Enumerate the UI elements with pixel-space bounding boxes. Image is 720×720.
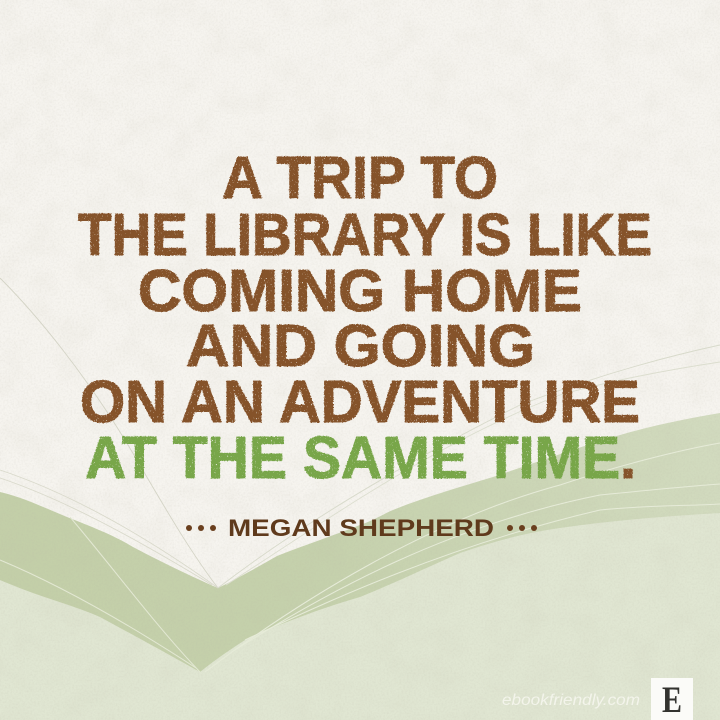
website credit: ebookfriendly.com bbox=[502, 692, 640, 709]
author name: MEGAN SHEPHERD bbox=[228, 515, 494, 542]
quote line 5: ON AN ADVENTURE bbox=[80, 369, 640, 435]
pale lines on left band bbox=[0, 560, 196, 668]
book band: dark green page edge bbox=[0, 413, 720, 680]
pale lines on right band bbox=[205, 443, 720, 672]
leading dots bbox=[186, 525, 216, 531]
quote line 4: AND GOING bbox=[186, 313, 535, 379]
quote line 2: THE LIBRARY IS LIKE bbox=[78, 202, 652, 268]
author attribution bbox=[186, 515, 537, 542]
quote line 6: green highlight: AT THE SAME TIME. bbox=[85, 425, 636, 491]
logo badge bbox=[651, 678, 693, 720]
quote line 3: COMING HOME bbox=[138, 258, 582, 324]
book lower page: pale green bbox=[0, 513, 720, 720]
green open book shape bbox=[0, 413, 720, 720]
thin grey lines on right page bbox=[218, 345, 720, 588]
book page lines bbox=[0, 278, 720, 672]
logo letter: E bbox=[662, 680, 682, 720]
trailing dots bbox=[507, 525, 537, 531]
thin grey lines on left page bbox=[0, 278, 218, 588]
quote bbox=[78, 145, 652, 491]
logo background bbox=[651, 678, 693, 720]
quote line 1: A TRIP TO bbox=[222, 145, 498, 211]
